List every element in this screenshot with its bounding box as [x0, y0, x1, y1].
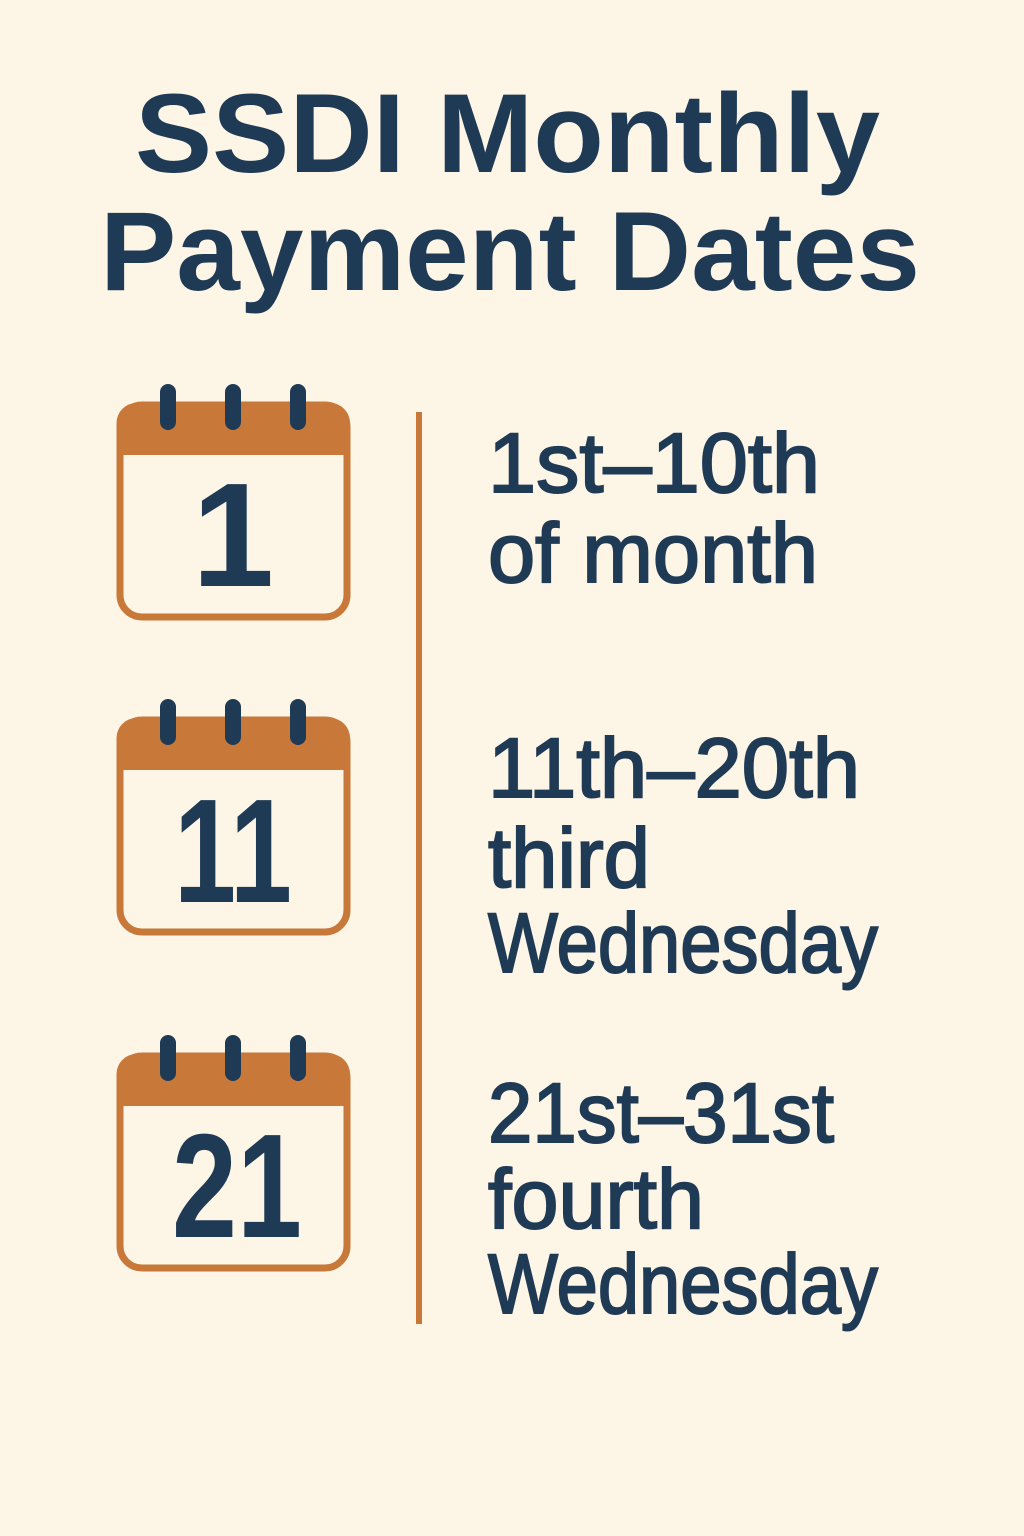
calendar icon: 21: [116, 1035, 350, 1269]
calendar icon: 11: 11: [174, 769, 292, 934]
title: SSDI Monthly: [135, 71, 880, 196]
text: 21st-31st: Wednesday: [488, 1237, 878, 1331]
text: 11th-20th: 11th–20th: [488, 721, 860, 815]
text: 1st-10th: [488, 416, 820, 600]
text: 11th-20th: [488, 721, 878, 990]
calendar icon: 1: 1: [192, 453, 274, 618]
text: 21st-31st: [488, 1066, 878, 1331]
title: Payment Dates: [100, 189, 920, 314]
calendar icon: 1: [116, 384, 350, 618]
title: [100, 71, 920, 314]
calendar icon: 21: 21: [172, 1104, 302, 1269]
text: 1st-10th: of month: [488, 506, 818, 600]
calendar icon: 11: [116, 699, 350, 934]
timeline line: [416, 412, 422, 1324]
text: 21st-31st: 21st–31st: [488, 1066, 834, 1160]
text: 1st-10th: 1st–10th: [488, 416, 820, 510]
text: 21st-31st: fourth: [488, 1152, 704, 1246]
text: 11th-20th: Wednesday: [488, 896, 878, 990]
text: 11th-20th: third: [488, 811, 650, 905]
